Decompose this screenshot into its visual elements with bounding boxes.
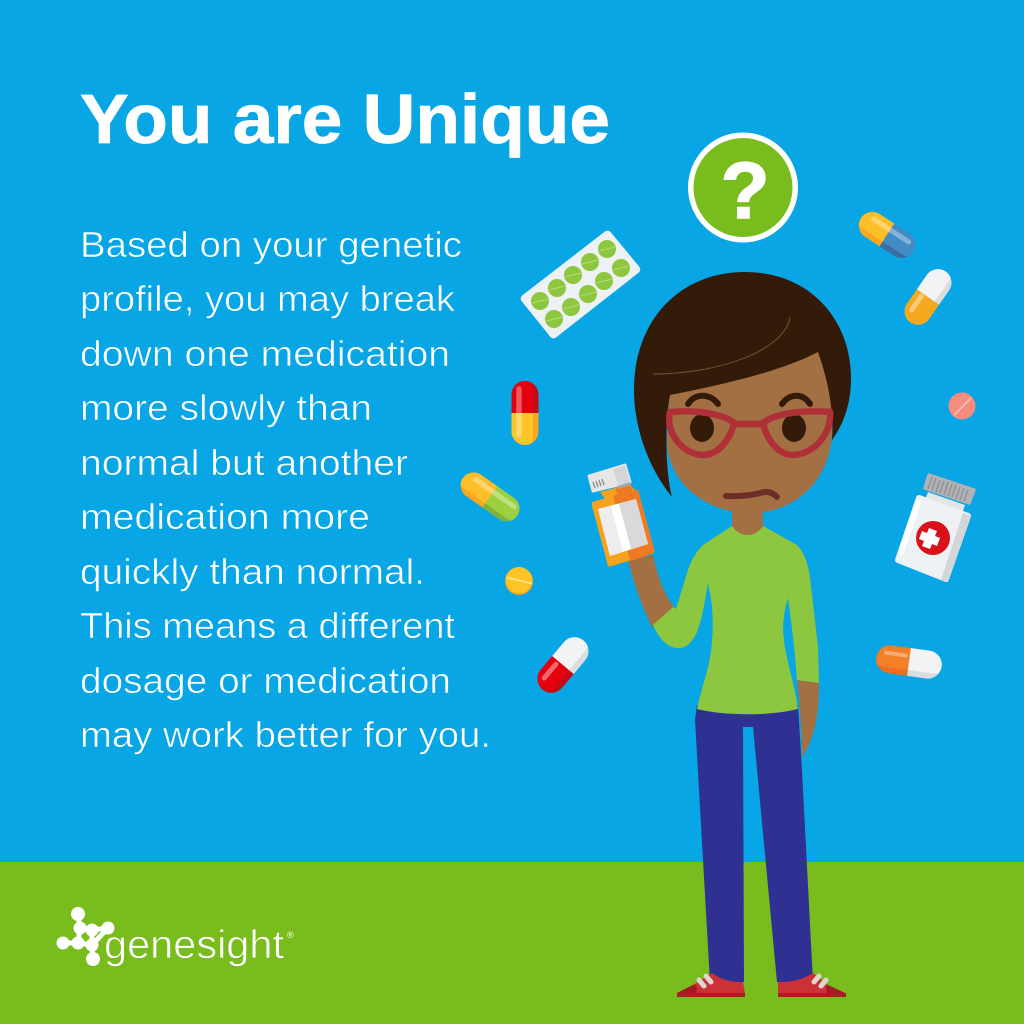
body text: medication more — [80, 496, 370, 537]
left shoe — [677, 973, 745, 997]
body text: dosage or medication — [80, 660, 451, 701]
logo mark — [56, 907, 114, 966]
body text: profile, you may break — [80, 278, 456, 319]
hand-held orange pill bottle — [589, 465, 652, 564]
icon: capsule white and orange — [899, 264, 957, 330]
body text: normal but another — [80, 442, 408, 483]
body text — [80, 224, 491, 755]
right shoe — [778, 973, 846, 997]
glasses — [669, 411, 830, 455]
icon: question mark badge: ? — [721, 146, 769, 235]
body text: down one medication — [80, 333, 450, 374]
icon: capsule orange and white — [874, 644, 944, 680]
registered mark: ® — [287, 930, 294, 940]
right hand — [797, 680, 819, 758]
icon: capsule white and red — [532, 631, 594, 699]
sweater — [653, 526, 819, 714]
body text: may work better for you. — [80, 714, 491, 755]
eyes — [690, 414, 806, 442]
mouth — [726, 492, 777, 497]
body text: This means a different — [80, 605, 455, 646]
icon: capsule red and yellow — [512, 381, 538, 445]
icon: blister pack — [525, 235, 636, 334]
pants — [695, 705, 813, 982]
icon: question mark badge — [688, 132, 798, 242]
body text: more slowly than — [80, 387, 372, 428]
body text: quickly than normal. — [80, 551, 425, 592]
icon: capsule yellow and blue — [854, 207, 920, 263]
left forearm — [628, 555, 674, 627]
ground band — [0, 862, 1024, 1024]
neck — [732, 500, 763, 535]
logo wordmark: genesight — [104, 923, 284, 967]
icon: capsule yellow and green — [455, 467, 525, 527]
title: You are Unique — [80, 80, 610, 158]
logo: genesight — [56, 907, 294, 967]
eyebrows — [688, 396, 810, 404]
icon: yellow tablet — [505, 567, 533, 595]
face — [667, 340, 832, 513]
hair — [634, 272, 851, 497]
icon: white medicine bottle — [898, 475, 974, 582]
icon: pink tablet — [948, 392, 976, 420]
hair highlight — [653, 317, 790, 374]
body text: Based on your genetic — [80, 224, 462, 265]
character: woman holding bottle — [589, 272, 851, 997]
